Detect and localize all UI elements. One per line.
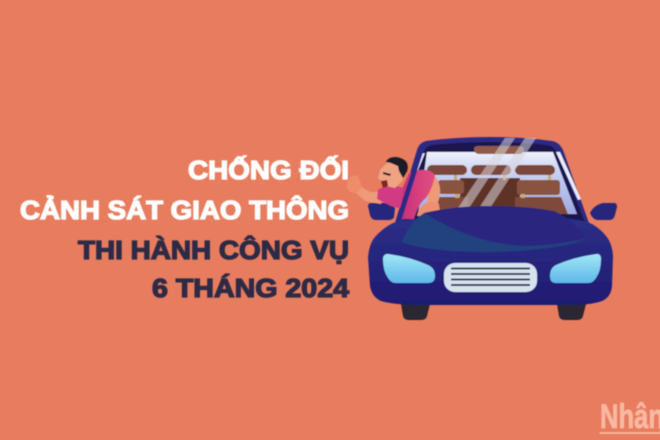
icon: car body — [368, 215, 613, 305]
icon: left mirror — [368, 203, 395, 220]
arm and fist — [356, 186, 382, 204]
icon: left headlight — [383, 254, 435, 283]
icon: driver — [347, 157, 440, 219]
icon: windshield — [418, 152, 577, 214]
torso — [402, 170, 435, 219]
left seat cushion — [438, 197, 469, 214]
icon: hood — [402, 206, 587, 252]
hand on door — [417, 202, 440, 216]
arm on door — [426, 172, 440, 210]
illustration: car with angry driver — [347, 137, 617, 320]
heading line: dark: 6 THÁNG 2024 — [152, 273, 350, 303]
icon: door pillar — [395, 143, 425, 225]
sleeve — [377, 185, 404, 209]
right seat back — [517, 180, 560, 195]
icon: roof and windshield frame — [394, 137, 590, 226]
neck and face — [378, 162, 403, 188]
icon: side window strips — [412, 152, 581, 200]
heading line: dark — [78, 235, 350, 303]
heading line: white: CẢNH SÁT GIAO THÔNG — [20, 195, 349, 225]
heading line: dark: THI HÀNH CÔNG VỤ — [78, 235, 349, 265]
icon: rear-view mirror — [474, 146, 524, 154]
icon: seats — [427, 165, 568, 214]
icon: grille — [444, 263, 537, 292]
icon: wheels — [401, 304, 586, 320]
icon: right headlight — [550, 254, 601, 283]
icon: right mirror — [590, 203, 617, 220]
heading line: white: CHỐNG ĐỐI — [188, 155, 349, 185]
mouth — [381, 180, 388, 188]
eyebrow — [383, 172, 391, 176]
headrests — [427, 165, 555, 175]
center rear shadow — [460, 178, 520, 214]
right seat cushion — [515, 197, 568, 214]
left seat back — [438, 180, 464, 194]
heading line: white — [20, 155, 349, 225]
icon: windshield reflections — [458, 138, 536, 208]
hair — [386, 157, 408, 178]
title — [20, 155, 350, 303]
